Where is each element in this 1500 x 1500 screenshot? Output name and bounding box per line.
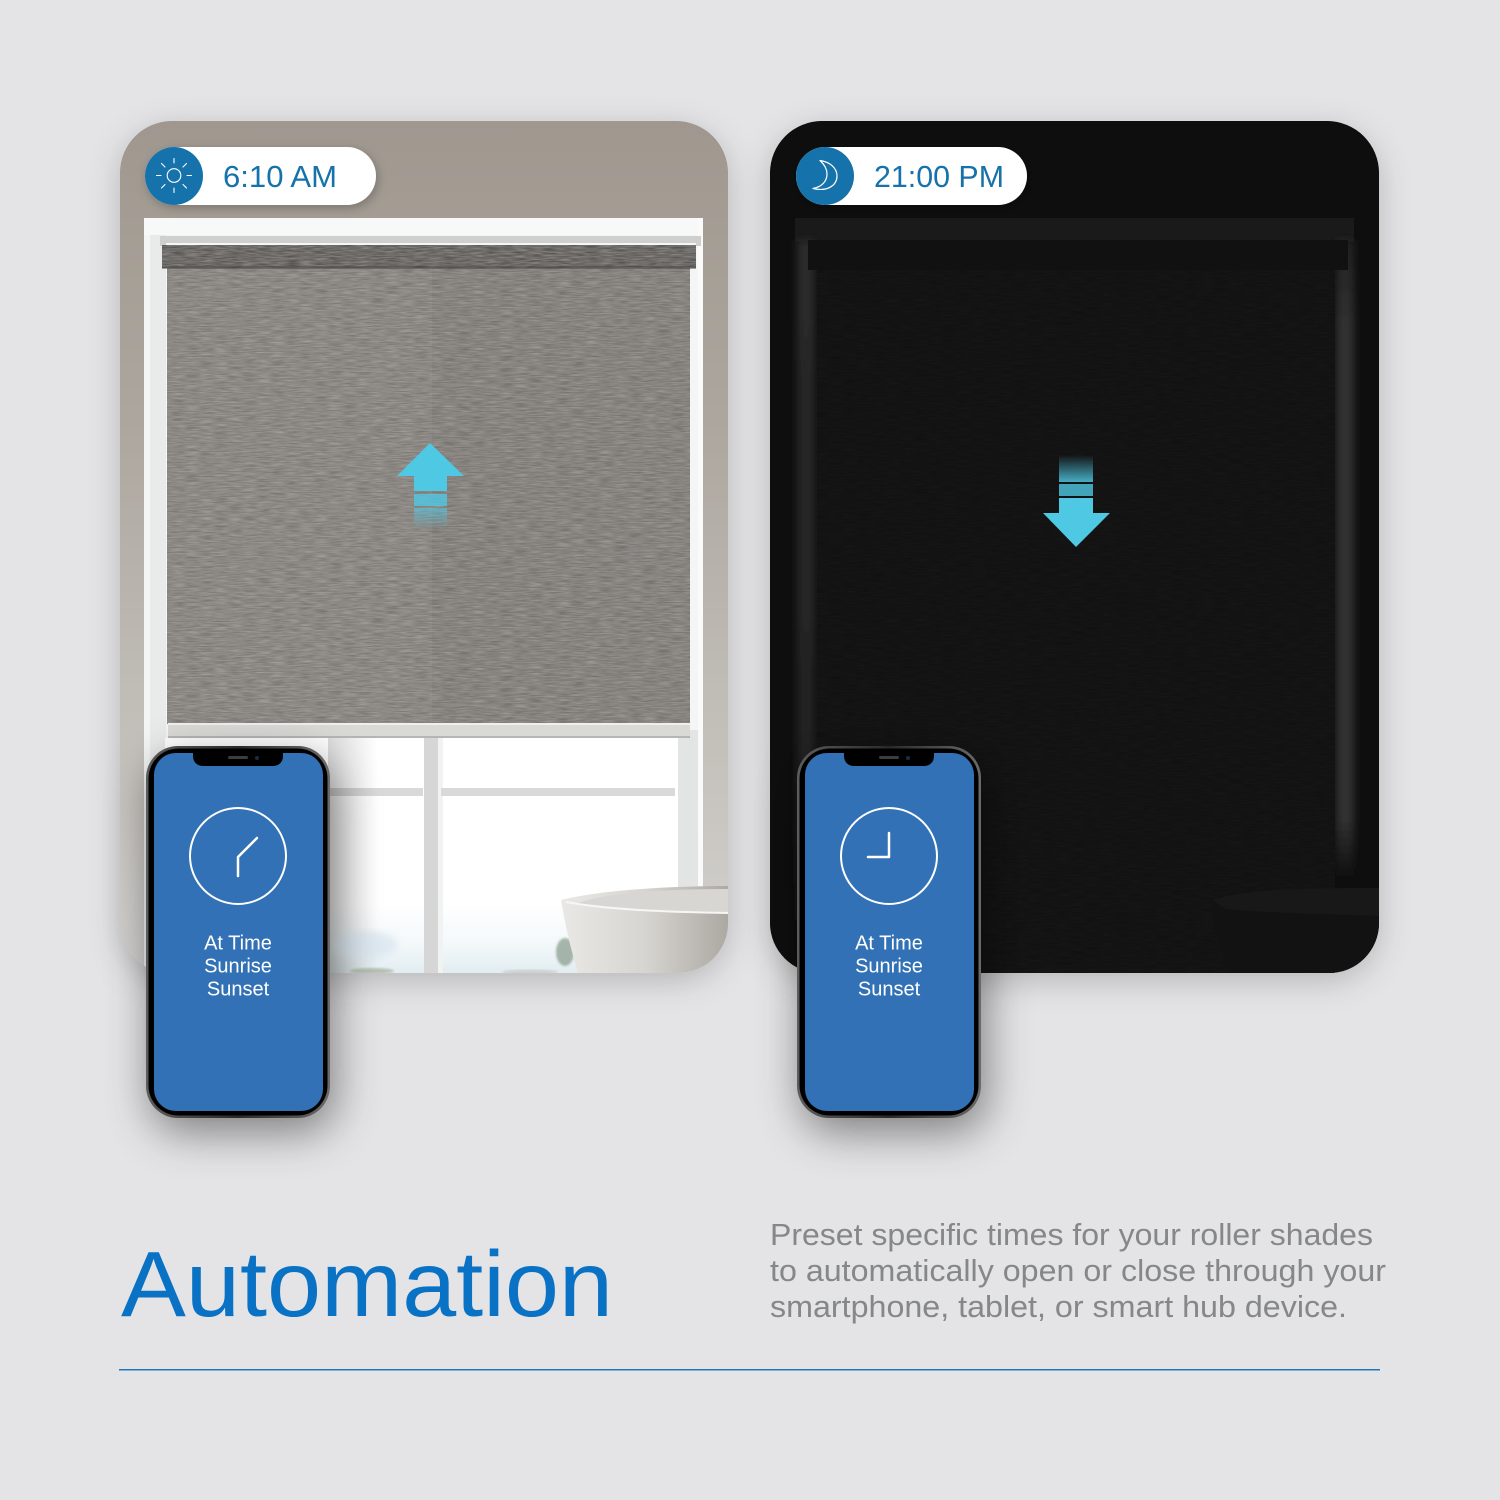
schedule options: Sunrise (204, 956, 272, 978)
phone: morning (146, 746, 330, 1118)
arrow up (397, 443, 464, 529)
time pill: 6:10 AM (145, 147, 376, 205)
schedule options: Sunrise (855, 956, 923, 978)
panel: night window scene (770, 121, 1379, 1118)
description text: to automatically open or close through your (770, 1253, 1386, 1288)
icon: moon (796, 147, 854, 205)
panel shadow (770, 121, 1379, 973)
panel: morning window scene (120, 121, 728, 1118)
title: Automation (121, 1232, 613, 1336)
description text: Preset specific times for your roller shades (770, 1217, 1373, 1252)
icon: sun (145, 147, 203, 205)
darkened window photo (770, 121, 1379, 973)
phone: night (797, 746, 981, 1118)
schedule options: Sunset (207, 978, 270, 1000)
description text: smartphone, tablet, or smart hub device. (770, 1289, 1347, 1324)
description text (770, 1217, 1386, 1324)
dark bathtub (1332, 925, 1379, 973)
time pill: 21:00 PM (796, 147, 1027, 205)
window photo (120, 218, 728, 973)
time label: 21:00 PM (874, 159, 1004, 194)
time label: 6:10 AM (223, 159, 337, 194)
notch (193, 752, 283, 766)
notch (844, 752, 934, 766)
arrow down (1043, 455, 1110, 547)
schedule options: At Time (855, 932, 923, 954)
schedule options: Sunset (858, 978, 921, 1000)
panel shadow (120, 121, 728, 973)
roller shade (160, 236, 701, 738)
icon: clock 9:00 (841, 808, 937, 904)
divider line (119, 1369, 1380, 1370)
bathtub (561, 886, 728, 973)
schedule options (855, 932, 923, 1000)
schedule options (204, 932, 272, 1000)
icon: clock 6:10 (190, 808, 286, 904)
schedule options: At Time (204, 932, 272, 954)
